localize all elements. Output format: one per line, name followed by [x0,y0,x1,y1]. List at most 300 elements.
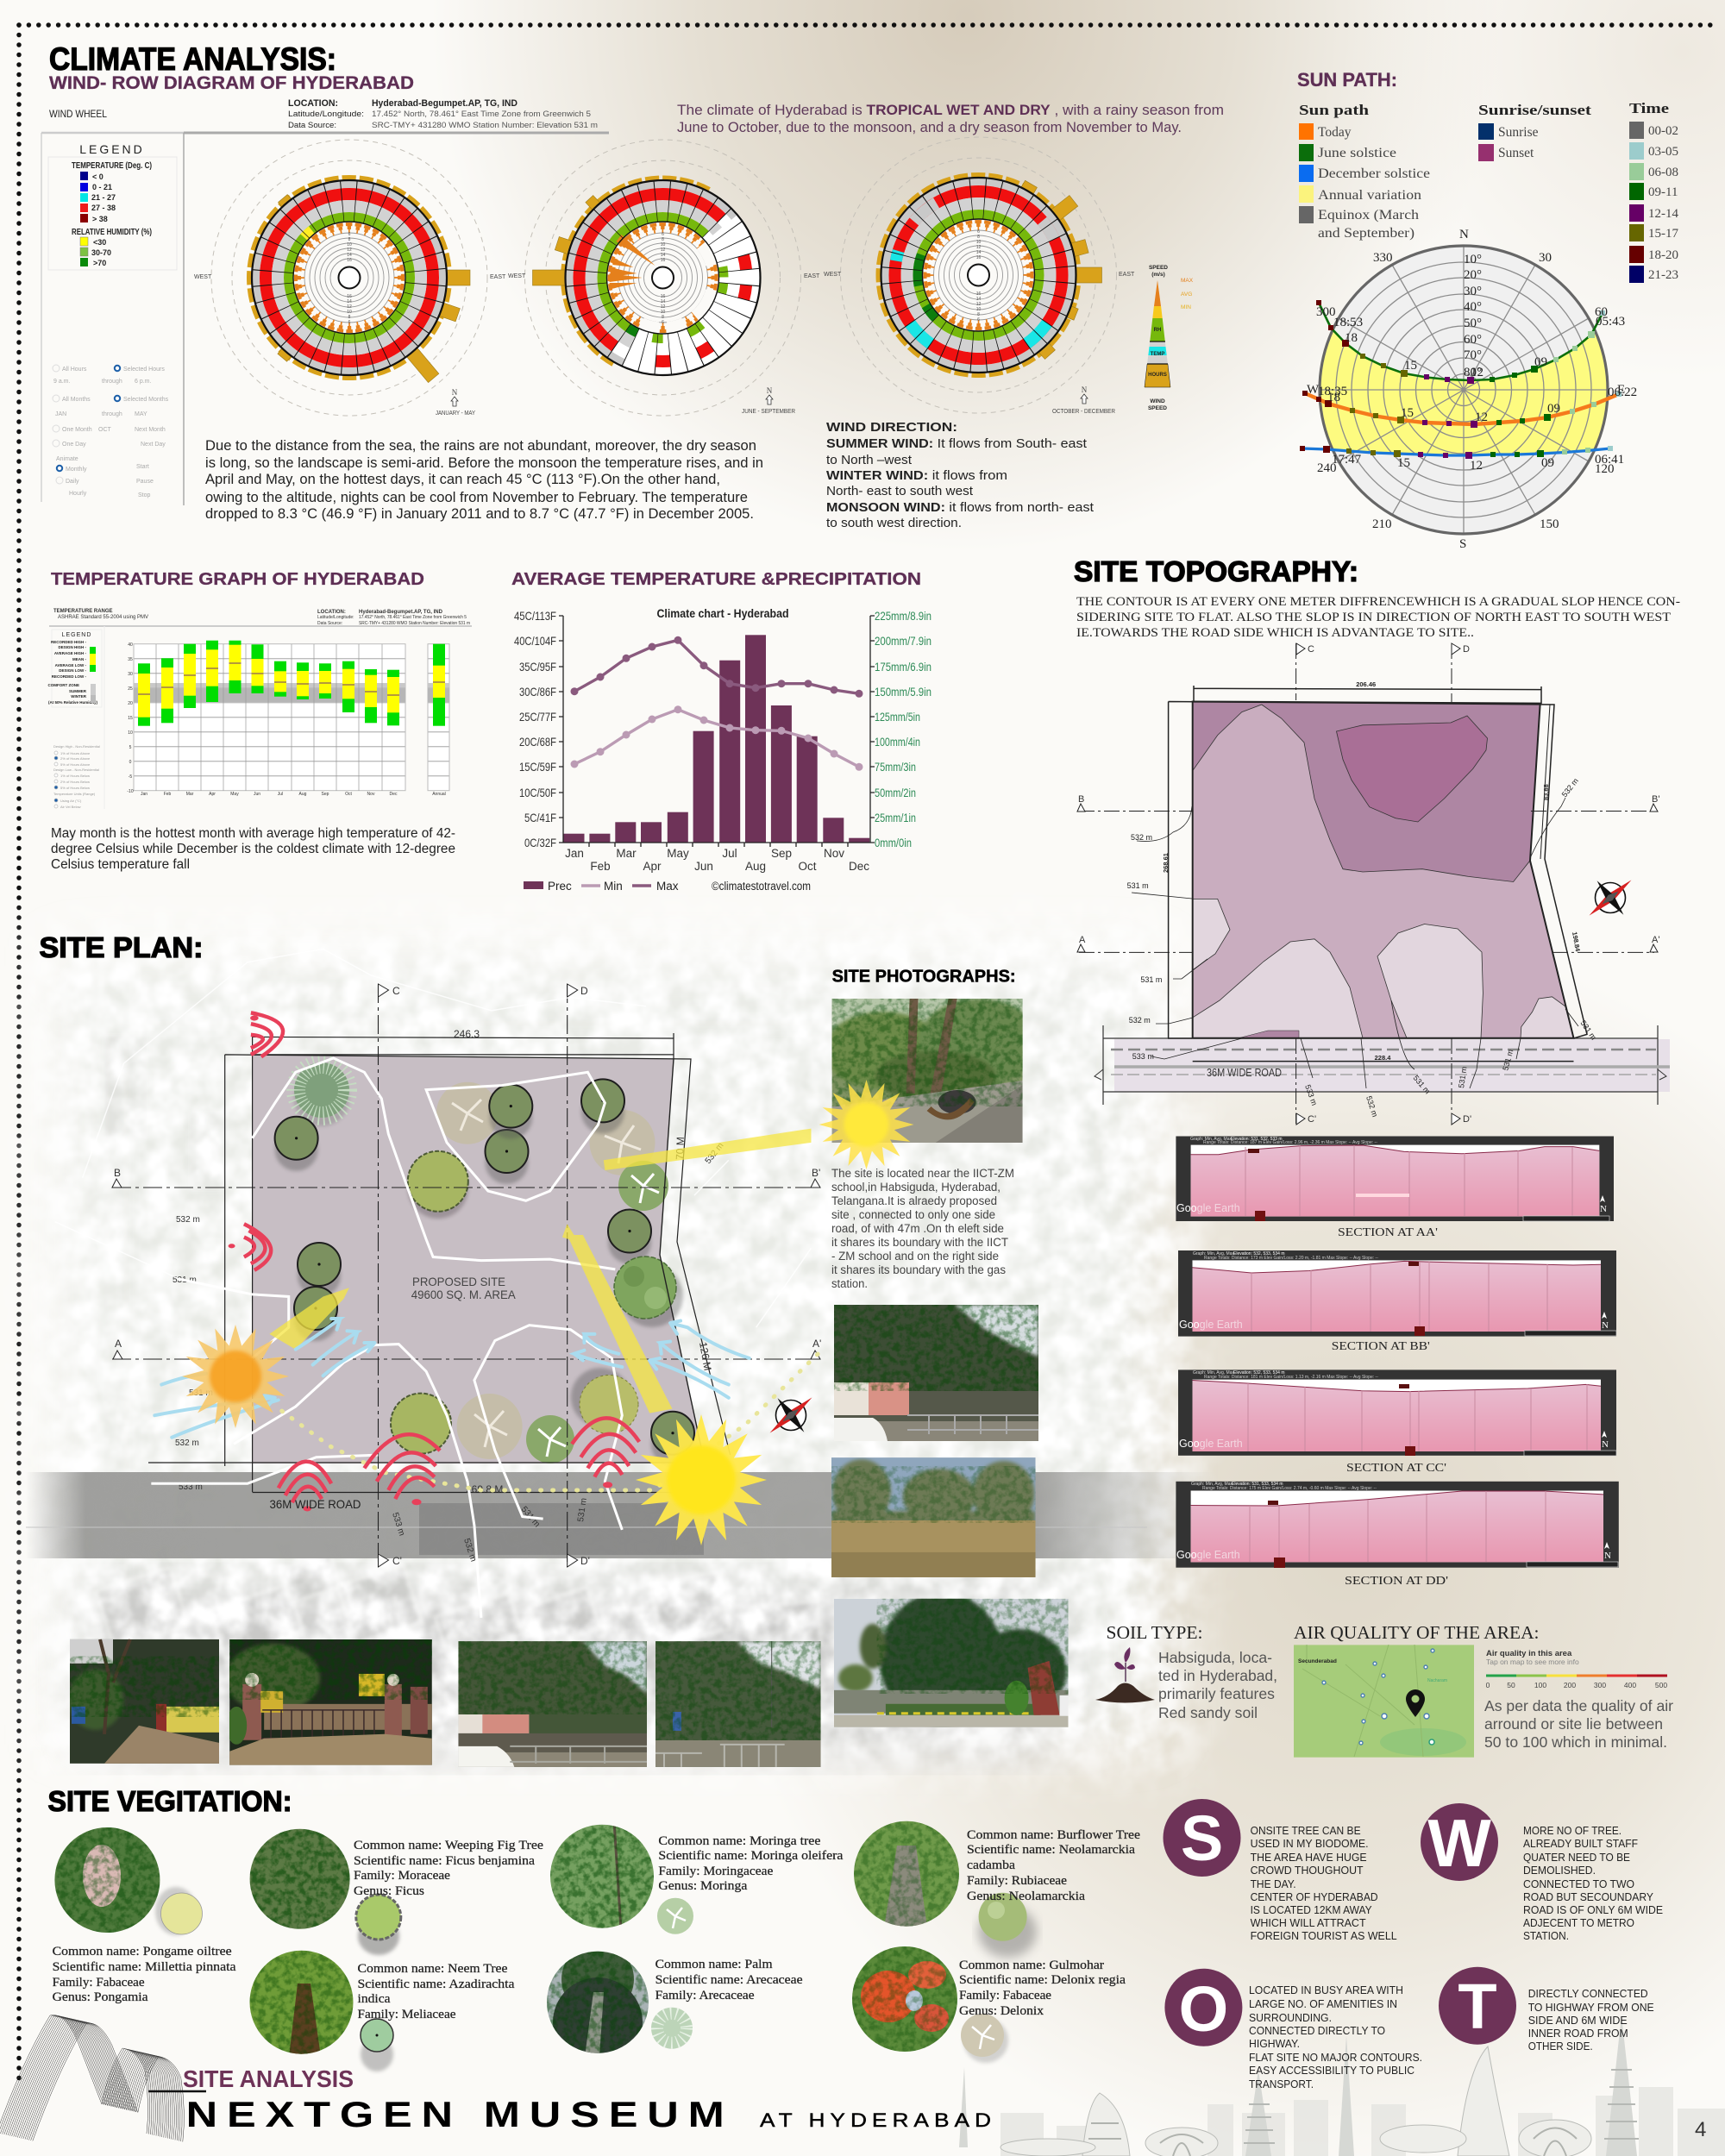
wind speed legend: SPEED [1148,405,1167,411]
wind speed legend: WIND [1150,398,1165,404]
temperature range chart: 1% of Hours Below [60,774,90,778]
vegetation: burflower tree: Scientific name: Neolamarckia [967,1843,1135,1857]
temperature range chart: DESIGN HIGH - [58,645,86,649]
temperature range chart: -10 [127,789,134,794]
wind rose direction labels: WEST [824,272,842,278]
vegetation: burflower tree: cadamba [967,1858,1015,1872]
sun path legend: Sunrise [1498,125,1539,140]
sun path legend: and September) [1318,226,1414,241]
wind wheel controls: Start [136,464,149,470]
sun path chart [1300,228,1637,551]
vegetation: gulmohar [850,1945,1126,2063]
subtitle: at hyderabad: AT HYDERABAD [760,2109,996,2131]
site topography map: B' [1652,794,1659,805]
climate chart: 125mm/5in [875,710,920,724]
sun path legend: Sun path [1299,102,1370,118]
temperature range chart: DESIGN LOW - [59,668,86,673]
title: site analysis: SITE ANALYSIS [183,2065,354,2092]
road band behind site plan [26,1472,1216,1558]
SWOT: opportunities: LARGE NO. OF AMENITIES IN [1249,1997,1397,2010]
climate chart: 45C/113F [514,609,556,623]
wind wheel controls: Stop [138,492,151,498]
wind wheel legend: < 0 [92,172,104,181]
temperature range chart: TEMPERATURE RANGE [53,609,113,614]
vegetation: pongame oiltree [52,1824,236,2004]
temperature paragraph: May month is the hottest month with average high temperature of 42- [51,826,455,841]
wind wheel legend: 0 - 21 [92,183,112,191]
soil description: primarily features [1158,1685,1275,1702]
wind direction text: WIND DIRECTION: [826,421,957,435]
wind wheel legend: <30 [93,238,106,247]
elevation section BB: Google Earth [1179,1319,1243,1331]
site description text: station. [831,1277,868,1290]
site photograph 1 [831,999,1023,1143]
SWOT: strengths: WHICH WILL ATTRACT [1251,1916,1366,1929]
plan contours and arrows in source coordinates [55,949,818,1618]
air quality scale: 500 [1655,1681,1667,1689]
wind wheel controls: One Month [62,427,92,433]
wind wheel controls: Hourly [69,491,87,497]
elevation section CC: N [1602,1439,1609,1450]
site topography map: 83.88 [1542,784,1550,800]
wind wheel controls: One Day [62,442,86,448]
site topography map [1077,643,1670,1125]
vegetation: burflower tree [850,1820,1140,1958]
sun path chart: 09 [1547,402,1560,416]
wind direction text: SUMMER WIND: It flows from South- east [826,437,1087,451]
air quality map: Secunderabad [1298,1658,1337,1664]
climate chart: 150mm/5.9in [875,685,932,699]
temperature range chart: 1% of Hours Above [60,751,91,755]
heading: site vegetation: SITE VEGITATION: [48,1785,292,1817]
location header: LOCATION: [288,98,338,109]
site plan drawing: A' [812,1338,821,1350]
wind wheel controls: MAY [135,411,147,417]
sun path chart: 150 [1540,517,1559,531]
air quality scale: 50 [1507,1681,1515,1689]
temperature range chart: COMFORT ZONE [48,683,79,687]
site topography map: D [1463,644,1470,655]
futuristic skyline backdrop [959,2015,1725,2156]
climate chart: Aug [745,860,766,873]
SWOT: opportunities: TRANSPORT. [1249,2078,1314,2090]
temperature range chart: Annual [432,792,446,797]
elevation section AA: N [1600,1204,1607,1214]
contour labels: 533 m [1303,1083,1319,1106]
climate chart: 200mm/7.9in [875,634,932,648]
SWOT: opportunities: O [1179,1973,1228,2045]
air quality description [1484,1697,1673,1751]
site photograph 3 [831,1457,1036,1577]
temperature range chart: 35 [128,657,133,662]
air quality scale: 200 [1564,1681,1576,1689]
temperature range chart: 10 [128,730,133,736]
plan contour labels [172,1141,725,1563]
wind wheel controls: Daily [66,479,79,485]
sun path chart: 18 [1345,331,1358,345]
SWOT: strengths: CROWD THOUGHOUT [1251,1864,1364,1877]
vegetation: moringa: Family: Moringaceae [658,1865,774,1878]
sun path legend: 18-20 [1648,248,1678,262]
elevation section CC: Google Earth [1179,1438,1243,1450]
SWOT: weaknesses: ADJECENT TO METRO [1523,1916,1634,1929]
sun path chart: 10° [1464,253,1482,266]
climate chart: 35C/95F [519,660,556,674]
air quality description: 50 to 100 which in minimal. [1484,1733,1667,1751]
site plan drawing: C [392,985,400,997]
entrance photograph 1 [70,1639,219,1764]
plot polygon [253,1055,705,1463]
climate paragraph: Due to the distance from the sea, the rains are not abundant, moreover, the dry season [205,438,756,454]
vegetation: palm: Family: Arecaceae [656,1989,755,2002]
vegetation: gulmohar: Scientific name: Delonix regia [959,1973,1126,1987]
site topography map: A' [1652,935,1659,945]
wind rose direction labels: N [452,388,458,397]
SWOT: strengths: ONSITE TREE CAN BE [1251,1824,1361,1837]
wind rose direction labels: WEST [508,273,526,279]
location header: SRC-TMY+ 431280 WMO Station Number: Elevation 531 m [372,121,598,129]
plan contour labels: 531 m [172,1275,197,1285]
section and dimension lines [112,984,818,1567]
temperature range chart: 5 [129,745,132,750]
climate chart: 15C/59F [519,760,556,774]
SWOT: weaknesses: W [1427,1805,1491,1881]
temperature range chart: 40 [128,642,133,648]
SWOT: weaknesses: MORE NO OF TREE. [1523,1824,1622,1837]
elevation section AA: Elevation: 531, 532, 533 m [1231,1137,1282,1142]
location header: Hyderabad-Begumpet.AP, TG, IND [372,98,518,109]
icon: left sun [182,1325,289,1428]
heading: site photographs: SITE PHOTOGRAPHS: [832,968,1016,987]
section DD caption: SECTION AT DD' [1345,1575,1448,1588]
wind speed legend: RH [1154,328,1161,333]
heading: temperature graph: TEMPERATURE GRAPH OF HYDERABAD [51,570,424,589]
road strip [1095,1025,1670,1105]
location header [288,98,598,129]
wind direction text: to south west direction. [826,517,962,530]
temperature range chart: Jul [278,792,283,797]
sun path legend: 06-08 [1648,166,1678,179]
site description text: - ZM school and on the right side [831,1250,999,1263]
site plan drawing: 269.8 M [466,1483,503,1495]
sun path legend: Equinox (March [1318,208,1419,222]
SWOT: weaknesses: ROAD BUT SECOUNDARY [1523,1890,1653,1903]
vegetation: gulmohar: Genus: Delonix [959,2004,1044,2018]
icon: soil mound with sapling [1095,1647,1155,1702]
wind wheel controls: 6 p.m. [135,379,152,385]
climate chart: Oct [798,860,817,873]
climate intro text [677,103,1224,135]
SWOT: weaknesses: ROAD IS OF ONLY 6M WIDE [1523,1903,1663,1916]
elevation section CC: Graph: Min, Avg, Max [1193,1370,1234,1376]
vegetation: moringa: Common name: Moringa tree [658,1834,821,1848]
wind wheel controls: through [102,379,122,385]
wind wheel controls: Selected Hours [123,367,165,373]
SWOT: strengths: CENTER OF HYDERABAD [1251,1890,1378,1903]
SWOT: strengths [1163,1799,1397,1942]
temperature range chart: 0 [129,760,132,765]
wind speed legend: MAX [1181,278,1194,284]
location header: 17.452° North, 78.461° East Time Zone from Greenwich 5 [372,110,591,118]
elevation section BB: N [1602,1320,1609,1331]
soil description [1158,1649,1277,1721]
wind wheel controls: Next Day [141,442,166,448]
site photograph 4 [834,1599,1068,1727]
SWOT: threats: INNER ROAD FROM [1528,2027,1628,2040]
elevation section DD: Elevation: 531, 533, 534 m [1232,1482,1283,1487]
site plan drawing: D' [580,1555,590,1567]
sun path chart: E [1617,383,1625,397]
contour labels: 531 m [1501,1049,1515,1072]
topography description: THE CONTOUR IS AT EVERY ONE METER DIFFRENCEWHICH IS A GRADUAL SLOP HENCE CON- [1076,595,1680,609]
wind wheel controls: Selected Months [123,397,169,403]
plan contour labels: 532 m [176,1215,200,1225]
climate chart: Jan [565,847,584,860]
plan contour labels: 532 m [175,1438,199,1448]
temperature range chart [48,609,472,809]
wind wheel frame lines [41,133,609,505]
wind speed legend: HOURS [1148,373,1167,378]
SWOT: opportunities: LOCATED IN BUSY AREA WITH [1249,1984,1403,1996]
climate paragraph: April and May, on the hottest days, it can reach 45 °C (113 °F).On the other hand, [205,472,720,487]
SWOT: weaknesses: QUATER NEED TO BE [1523,1851,1630,1864]
contour labels: 532 m [1364,1095,1379,1118]
plan labels: 36M WIDE ROAD [269,1497,361,1511]
temperature range chart: Nov [367,792,375,797]
entrance photograph 3 [458,1641,647,1767]
air quality scale: 100 [1534,1681,1546,1689]
heading: site plan: SITE PLAN: [40,931,203,963]
sun path legend [1299,100,1678,283]
SWOT: threats: DIRECTLY CONNECTED [1528,1987,1648,2000]
contour labels: 531 m [1578,1018,1598,1042]
site topography map: C' [1308,1114,1316,1125]
wind wheel controls: Next Month [135,427,166,433]
temperature range chart: Temperature Units (Range) [53,792,96,796]
temperature range chart: Data Source: [317,621,342,626]
temperature range chart: SUMMER [69,689,87,693]
SWOT: opportunities: HIGHWAY. [1249,2037,1300,2050]
plan contour labels: 532 m [704,1141,725,1166]
vegetation: pongame oiltree: Scientific name: Millettia pinnata [53,1960,236,1974]
site description text: school,in Habsiguda, Hyderabad, [831,1181,1000,1194]
contour labels: 532 m [1129,1016,1151,1025]
sun path legend: Today [1318,125,1352,140]
site description text: it shares its boundary with the IICT [831,1236,1008,1249]
vegetation: moringa: Scientific name: Moringa oleifera [658,1849,844,1863]
temperature range chart: Air Vel Below [60,805,81,809]
temperature range chart: SRC-TMY+ 431280 WMO Station Number: Elevation 531 m [359,621,470,626]
wind speed legend: MIN [1181,304,1191,310]
plan compass [767,1392,815,1438]
temperature range chart: Sep [322,792,329,797]
climate chart: Max [656,880,679,893]
vegetation: neem: Family: Meliaceae [357,2008,456,2021]
vegetation: palm [547,1951,802,2053]
vegetation: neem: indica [357,1992,391,2006]
heading: site topography: SITE TOPOGRAPHY: [1074,555,1358,587]
elevation section DD [1176,1482,1619,1568]
site plan drawing: 246.3 [454,1028,480,1040]
wind rose direction labels: EAST [490,274,506,280]
air quality map [1294,1645,1474,1758]
section BB caption: SECTION AT BB' [1332,1340,1430,1353]
dimension lines [1168,686,1587,1062]
sun path chart: 18:53 [1333,316,1363,329]
wind wheel legend: 27 - 38 [91,204,116,212]
heading: sun path: SUN PATH: [1297,69,1397,91]
plan contour labels: 531 m [576,1497,589,1522]
temperature paragraph: Celsius temperature fall [51,857,190,872]
elevation section AA: Range Totals: Distance: 187 m Elev Gain/Loss: 2.96 m, -2.36 m Max Slope: -- Avg Slope: -- [1203,1140,1377,1145]
climate chart: Dec [849,860,869,873]
SWOT: threats: T [1458,1971,1497,2042]
climate intro text: June to October, due to the monsoon, and a dry season from November to May. [677,120,1182,135]
vegetation: burflower tree: Family: Rubiaceae [967,1874,1067,1888]
icon: lower sun [636,1414,767,1545]
climate paragraph: is long, so the landscape is semi-arid. Before the monsoon the temperature rises, and in [205,455,763,471]
vegetation: weeping fig: Family: Moraceae [354,1869,450,1883]
sun path chart: 05:43 [1596,315,1625,329]
air quality description: As per data the quality of air [1484,1697,1673,1714]
temperature range chart: Design High - Non-Residential [53,744,100,749]
temperature range chart: 2% of Hours Above [60,756,91,761]
SWOT: weaknesses: CONNECTED TO TWO [1523,1877,1634,1890]
vegetation: pongame oiltree: Common name: Pongame oiltree [53,1945,232,1959]
sun path chart: 300 [1316,305,1335,319]
temperature range chart: AVERAGE LOW - [55,663,86,667]
SWOT: threats [1439,1967,1654,2053]
site description text: The site is located near the IICT-ZM [831,1167,1014,1180]
location header: Data Source: [288,121,336,129]
SWOT: strengths: IS LOCATED 12KM AWAY [1251,1903,1372,1916]
climate chart: 75mm/3in [875,760,916,774]
vegetation: weeping fig [246,1824,543,1955]
site topography map: A [1079,935,1086,945]
wind speed legend: AVG [1181,291,1192,298]
vegetation: burflower tree: Common name: Burflower Tree [967,1828,1140,1842]
heading: average temperature and precipitation: AVERAGE TEMPERATURE &PRECIPITATION [511,570,921,589]
temperature range chart: 5% of Hours Above [60,762,91,767]
wind wheel controls: Pause [136,479,154,485]
road strip: 36M WIDE ROAD [1207,1066,1282,1079]
climate chart: 30C/86F [519,685,556,699]
climate chart: 25C/77F [519,710,556,724]
section AA caption: SECTION AT AA' [1338,1226,1438,1239]
elevation section CC: Range Totals: Distance: 181 m Elev Gain/Loss: 1.13 m, -2.16 m Max Slope: -- Avg Slope: -- [1204,1375,1378,1380]
sun path chart: 40° [1464,300,1482,314]
site plan drawing: B' [812,1167,820,1179]
site topography map: 228.4 [1375,1054,1391,1062]
air quality scale: 0 [1486,1681,1490,1689]
climate chart: Jun [694,860,713,873]
temperature range chart: Using Air (°C) [60,799,82,803]
climate chart: Jul [722,847,737,860]
title: nextgen museum: NEXTGEN MUSEUM [186,2094,734,2134]
wind direction text: MONSOON WIND: it flows from north- east [826,501,1094,515]
site description text: Telangana.It is alraedy proposed [831,1194,997,1207]
icon: ribbon logo [0,2015,206,2142]
sun path legend: 00-02 [1648,124,1678,138]
sun path chart: 30° [1464,285,1482,298]
site topography map: 198.84 [1571,931,1582,953]
sun path chart: 15 [1397,456,1410,470]
SWOT: threats: OTHER SIDE. [1528,2040,1593,2053]
plan contour labels: 532 m [461,1538,478,1563]
vegetation: burflower tree: Genus: Neolamarckia [967,1890,1085,1903]
temperature range chart: LOCATION: [317,610,346,615]
contour labels: 531 m [1140,975,1162,984]
wind wheel controls: All Hours [62,367,87,373]
climate paragraph: owing to the altitude, nights can be cool from November to February. The temperature [205,490,748,505]
plan labels: 49600 SQ. M. AREA [411,1288,516,1301]
vegetation: gulmohar: Common name: Gulmohar [959,1959,1104,1972]
sun path legend: 12-14 [1648,207,1678,221]
climate chart: Sep [771,847,792,860]
wind rose direction labels: OCTOBER - DECEMBER [1052,407,1115,415]
temperature range chart: Aug [299,792,307,797]
vegetation: neem [246,1949,515,2071]
icon: photo sun with yellow beam [819,1080,914,1169]
temperature range chart: Mar [186,792,194,797]
entrance photograph 2 [229,1639,432,1765]
temperature range chart: 20 [128,701,133,706]
sun path legend: 15-17 [1648,227,1678,241]
air quality scale: 400 [1624,1681,1636,1689]
topography description [1076,595,1680,640]
sun path chart: 80° [1464,366,1482,379]
site topography map: C [1308,644,1314,655]
site plan drawing: 70 M [674,1137,687,1160]
vegetation: palm: Scientific name: Arecaceae [656,1973,803,1987]
site topography map: 206.46 [1356,680,1376,688]
sun path legend: Sunset [1498,146,1534,160]
wind rose direction labels: JANUARY - MAY [436,409,475,417]
sun path legend: Sunrise/sunset [1478,102,1591,118]
sun path chart: 06:22 [1608,385,1637,399]
sun path chart: 09 [1541,456,1554,470]
climate chart: 10C/50F [519,786,556,799]
SWOT: opportunities: FLAT SITE NO MAJOR CONTOURS. [1249,2051,1422,2064]
wind wheel legend [48,142,177,270]
climate paragraph [205,438,763,522]
climate chart: 40C/104F [514,634,556,648]
temperature range chart: LEGEND [62,632,91,638]
subtitle: wind rose diagram: WIND- ROW DIAGRAM OF HYDERABAD [49,73,414,93]
sun path legend: June solstice [1318,146,1396,160]
sun path chart: 12 [1470,459,1483,473]
temperature range chart: Apr [209,792,216,797]
plan contour labels: 531 m [189,1388,213,1398]
climate chart: 225mm/8.9in [875,609,932,623]
temperature range chart: Design Low - Non-Residential [53,768,99,772]
temperature range chart: Dec [390,792,398,797]
climate chart: 100mm/4in [875,735,920,749]
SWOT: strengths: USED IN MY BIODOME. [1251,1837,1369,1850]
wind rose direction labels: WEST [194,274,212,280]
temperature range chart: ASHRAE Standard 55-2004 using PMV [58,615,148,620]
SWOT: opportunities: CONNECTED DIRECTLY TO [1249,2024,1385,2037]
site plan drawing: C' [392,1555,402,1567]
air quality scale: 300 [1594,1681,1606,1689]
site description text: road, of with 47m .On th eleft side [831,1222,1004,1235]
sun path chart: 12 [1475,411,1488,424]
temperature range chart: Feb [164,792,172,797]
elevation section DD: Google Earth [1176,1549,1240,1561]
title: climate analysis: CLIMATE ANALYSIS: [49,41,336,77]
sun path chart: N [1459,228,1469,241]
climate chart: May [667,847,689,860]
